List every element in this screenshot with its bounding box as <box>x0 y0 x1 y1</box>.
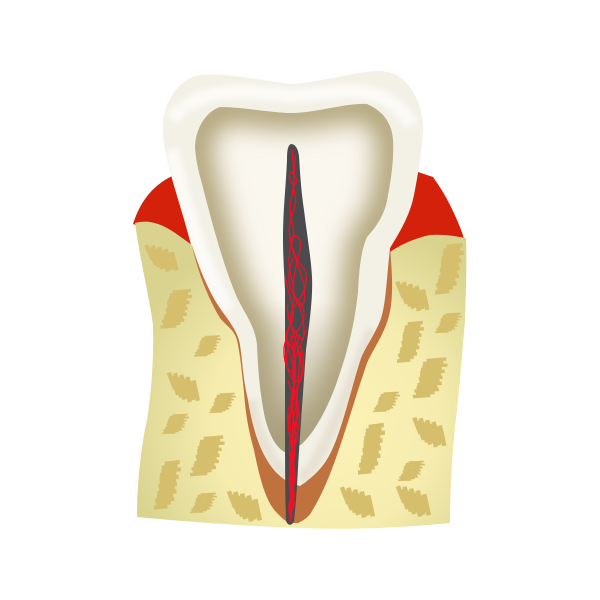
infographic: tooth cross-section <box>133 71 466 529</box>
bone texture spots <box>146 245 464 522</box>
gum: left red tissue <box>133 176 192 248</box>
gum: right red tissue <box>388 172 464 254</box>
jawbone <box>135 222 466 529</box>
pulp chamber <box>195 104 393 453</box>
root canal: dark pulp <box>283 144 312 525</box>
blood vessels: red network <box>284 150 306 522</box>
tooth: enamel and dentin <box>163 71 423 486</box>
periodontal ligament: brown layer <box>192 245 392 523</box>
